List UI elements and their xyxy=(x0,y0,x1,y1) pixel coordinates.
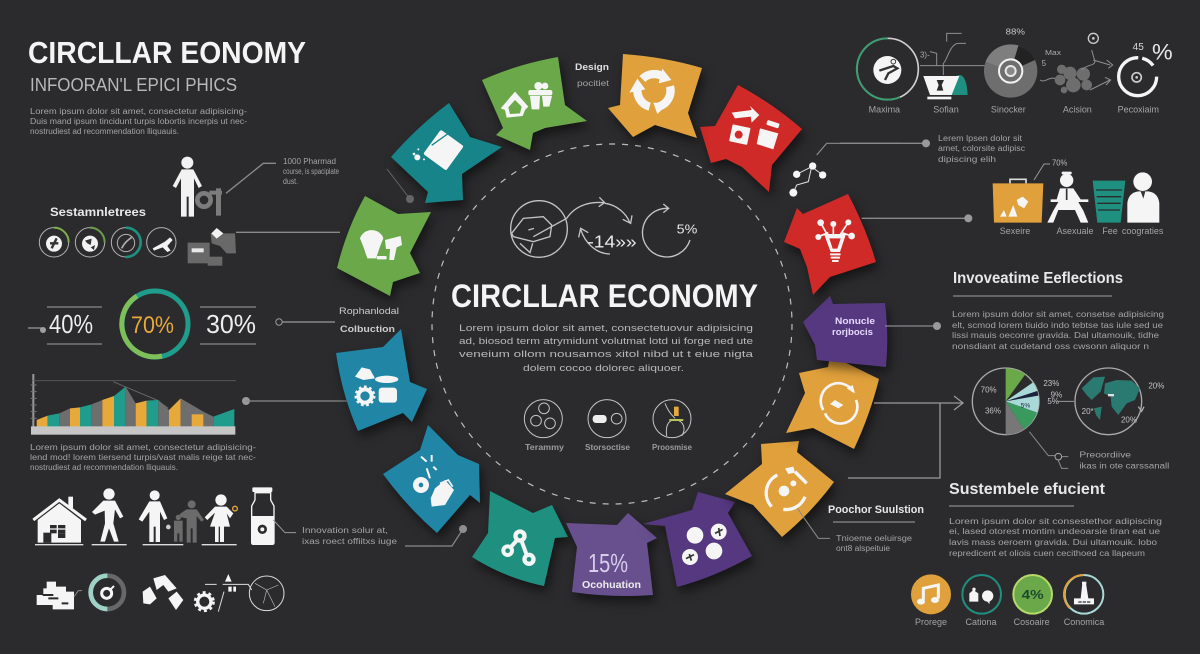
centre text block xyxy=(459,322,754,373)
chart: donut 70 percent: 70% xyxy=(131,312,174,339)
chart: pie: 5% xyxy=(1021,402,1030,409)
icon: 45 percent ring xyxy=(1119,39,1173,96)
icon: bucket and spark xyxy=(413,455,454,507)
text block: sustainable: Lorem ipsum dolor sit consestethor adipiscing xyxy=(949,517,1162,526)
connector: chart to collection xyxy=(242,397,347,405)
callout: pharmad: 1000 Pharmad xyxy=(283,157,336,166)
chart: globe xyxy=(1075,368,1164,435)
icon: maxima ring xyxy=(857,38,918,100)
callout: leader and text: ikas in ote carssanall xyxy=(1079,462,1170,471)
panel: centre icons xyxy=(511,197,697,438)
chart: globe: 20% xyxy=(1148,381,1164,390)
icon: target pie xyxy=(984,27,1061,98)
heading: innovative: Invoveatime Eeflections xyxy=(953,270,1123,287)
callout: innovation: Innovation solur at, xyxy=(302,526,388,535)
icon: molecule xyxy=(789,162,826,197)
label: design: pocitiet xyxy=(577,79,610,88)
panel: top right icons xyxy=(840,27,1173,236)
icon: briefcase xyxy=(993,158,1067,223)
shape: teal-green bottom arrow xyxy=(472,491,568,586)
labels: top icons: Pecoxiaim xyxy=(1118,104,1159,114)
icon: music xyxy=(911,574,951,614)
callout: pharmad: course, is spaciplate xyxy=(283,167,339,176)
text block: sustainable: ei, lased otorest montim undeoarsie tiran eat ue xyxy=(949,527,1161,536)
chart: donut 70 percent xyxy=(122,291,188,357)
connector: callout to teal shape xyxy=(405,525,467,546)
text block: chart caption: Lorem ipsum dolor sit amet, consectetur adipisicing- xyxy=(30,443,256,452)
text block: innovative: elt, scmod lorem tiuido indo tebtse tas iule sed ue xyxy=(952,321,1164,330)
text block: chart caption: lend mod! lorem tiersend turpis/vast malis reige tat nec- xyxy=(30,453,256,462)
icon: gear and containers xyxy=(355,367,398,405)
icon: figure circle xyxy=(653,400,691,438)
callout: innovation: ixas roect offiitxs iuge xyxy=(302,537,398,546)
centre text block: veneium ollom nousamos xitol nibd ut t eiue nigta xyxy=(459,348,754,359)
text block: poochor: ont8 alspeituie xyxy=(836,544,891,553)
text block: chart caption xyxy=(30,443,256,472)
title: CIRCLLAR EONOMY xyxy=(28,35,306,70)
icon: teal ring xyxy=(962,575,1001,614)
icon: person with tie xyxy=(1127,172,1159,223)
label: collection xyxy=(339,306,399,335)
icon: recycle xyxy=(629,69,671,114)
labels: bottom right: Prorege xyxy=(915,617,947,627)
icon: circular arrows with dots xyxy=(766,467,807,510)
centre heading: CIRCLLAR ECONOMY xyxy=(451,278,758,314)
icon: green 4 percent: 4% xyxy=(1022,588,1044,602)
icon: house xyxy=(33,497,86,543)
icon row: four small circles xyxy=(39,228,176,257)
icon: person bench xyxy=(1047,172,1088,223)
icon: grey family xyxy=(166,500,204,543)
stat: 40 percent xyxy=(28,307,102,344)
panel: pie and globe xyxy=(972,368,1170,471)
icon: woman xyxy=(205,494,237,542)
shape: red lower arrow xyxy=(784,194,876,295)
shape: green design arrow xyxy=(482,57,587,150)
text block: upper right: Lerem lpsen dolor sit xyxy=(938,134,1023,143)
label: purple arrow: Nonucle xyxy=(835,316,875,326)
labels: bottom right xyxy=(915,617,1104,627)
decor: ground lines xyxy=(35,543,237,547)
icon: tower ring xyxy=(1064,575,1103,614)
shape: blue lower arrow xyxy=(383,425,480,533)
icon: green 4 percent xyxy=(1013,575,1052,614)
label: purple arrow xyxy=(832,316,875,337)
chart: pie: 36% xyxy=(985,406,1001,415)
shape: red upper arrow xyxy=(700,85,802,192)
centre text block: dolem cocoo dolorec aliquoer. xyxy=(523,362,684,373)
icon: bottle xyxy=(252,487,296,544)
icon: pot and plant: 3)- xyxy=(920,50,930,59)
intro text block xyxy=(30,107,247,136)
text block: innovative xyxy=(952,310,1164,351)
shape: teal arrow xyxy=(391,103,502,203)
text block: innovative: lissi mauis oeconre gravida. Dal ultamouik, tidhe xyxy=(952,331,1160,340)
centre text block: ad, biosod term atrymidunt volutmat lotd ui forge ned ute xyxy=(459,335,753,346)
panel: bottom right circles xyxy=(911,574,1104,627)
icon: pot and plant xyxy=(920,33,985,99)
connector: orange to pie with arrow xyxy=(848,396,963,478)
heading: sustainable efficient: Sustembele efucient xyxy=(949,481,1105,498)
intro text block: nostrudiest ad recommendation lliquauis. xyxy=(30,127,179,136)
heading: poochor suulstion xyxy=(828,504,924,522)
shape: green left arrow xyxy=(337,196,431,296)
icon: tablet xyxy=(413,130,464,171)
icon: teal cup xyxy=(1093,181,1125,223)
icon: tools xyxy=(360,230,402,260)
shape: purple right arrow xyxy=(803,296,887,367)
text: 15 percent occlusion: Ocohuation xyxy=(582,580,641,591)
icon: target pie: 88% xyxy=(1006,27,1025,36)
icon: person standing xyxy=(139,490,167,542)
shape: orange top arrow xyxy=(608,54,702,138)
chart: pie xyxy=(972,368,1074,435)
labels: people row: Fee xyxy=(1102,226,1118,236)
label: design: Design xyxy=(575,62,609,73)
icon: storage circle xyxy=(588,400,626,438)
icons on upper-left arrows xyxy=(360,82,552,260)
text block: upper right: dipiscing elih xyxy=(938,155,996,164)
connector: orange lower xyxy=(797,508,830,538)
chart: pie: 70% xyxy=(981,386,997,395)
label: design xyxy=(575,62,610,88)
connector: teal shape xyxy=(387,169,414,203)
text block: upper right xyxy=(938,134,1025,164)
label: collection: Colbuction xyxy=(340,324,395,335)
labels: bottom right: Cosoaire xyxy=(1014,617,1050,627)
labels: top icons xyxy=(869,104,1159,114)
heading: sestamnletrees: Sestamnletrees xyxy=(50,205,146,219)
callout: leader and text: Preoordiive xyxy=(1079,450,1132,459)
chart: globe: 20* xyxy=(1082,407,1094,416)
text block: sustainable: repredicent et oliois cuen cecithoed ca llapeum xyxy=(949,549,1145,558)
labels: top icons: Acision xyxy=(1063,104,1092,114)
label: purple arrow: rorjbocis xyxy=(832,327,873,337)
subtitle: INFOORAN'L EPICI PHICS xyxy=(30,75,237,95)
connector: molecule xyxy=(817,143,900,155)
icon: cloud network xyxy=(1040,33,1113,93)
icon: target pie: Max xyxy=(1045,48,1061,57)
labels: top icons: Sofian xyxy=(933,104,959,114)
labels: top icons: Maxima xyxy=(869,104,900,114)
icons on upper-right arrows xyxy=(629,69,900,262)
icons on lower-left arrows xyxy=(355,367,536,566)
heading: poochor suulstion: Poochor Suulstion xyxy=(828,504,924,516)
text block: chart caption: nostrudiest ad recommendation lliquauis. xyxy=(30,463,178,472)
labels: centre icons xyxy=(525,443,693,452)
icon: briefcase: 70% xyxy=(1052,158,1067,167)
icon: 5 percent circle xyxy=(642,204,697,257)
icon row: bricks ring recycle gear globe xyxy=(37,574,284,612)
icon: 5 percent circle: 5% xyxy=(677,221,697,236)
panel: left upper icons xyxy=(39,157,340,266)
intro text block: Lorem ipsum dolor sit amet, consectetur adipisicing- xyxy=(30,107,247,116)
connector: purple to innovative xyxy=(885,322,941,330)
chart: area bars xyxy=(31,374,236,435)
text: 15 percent occlusion xyxy=(582,548,641,591)
intro text block: Duis mand ipsum tincidunt turpis lobortis incerpis ut nec- xyxy=(30,117,247,126)
labels: centre icons: Storsoctise xyxy=(585,443,631,452)
shape: orange bottom right arrow xyxy=(725,441,834,537)
icon: four dots xyxy=(682,524,727,565)
labels: people row: Asexuale xyxy=(1057,226,1093,236)
shape: purple bottom arrow xyxy=(643,492,752,587)
icon: house and cups xyxy=(501,82,552,118)
shape: blue collection arrow xyxy=(336,329,427,431)
icon: target pie: 5 xyxy=(1042,59,1047,68)
connector: lower text xyxy=(840,139,930,147)
icon: 45 percent ring: % xyxy=(1152,39,1173,64)
centre text block: Lorem ipsum dolor sit amet, consectetuovur adipisicing xyxy=(459,322,753,333)
icon: person walking xyxy=(92,488,123,542)
chart: pie: 23% xyxy=(1043,379,1059,388)
text block: upper right: amet, colorsite adipisc xyxy=(938,144,1025,153)
connector: red to people row xyxy=(862,214,972,222)
labels: centre icons: Terammy xyxy=(525,443,565,452)
callout: leader and text xyxy=(1029,432,1170,471)
shape: orange right arrow xyxy=(786,355,879,449)
labels: bottom right: Cationa xyxy=(966,617,996,627)
text block: sustainable: lavis mass oeroem gravida. Dui ultamouik. lobo xyxy=(949,538,1158,547)
icon: terrain circle xyxy=(524,400,562,438)
labels: people row: Sexeire xyxy=(1000,226,1030,236)
icons on lower-right arrows xyxy=(682,383,857,565)
text block: poochor xyxy=(836,534,913,553)
text: 14: -14»» xyxy=(587,232,637,252)
labels: bottom right: Conomica xyxy=(1064,617,1104,627)
chart: globe: 20% xyxy=(1121,416,1137,425)
icon: grey blocks with line xyxy=(188,228,340,266)
label: collection: Rophanlodal xyxy=(339,306,399,317)
text: 15 percent occlusion: 15% xyxy=(588,548,628,578)
shape: violet 15 percent arrow xyxy=(566,513,657,596)
icon: hand in circle xyxy=(511,201,567,257)
icon: box and jar xyxy=(729,106,780,149)
arrows: loop xyxy=(567,197,632,254)
chart: pie: 9% xyxy=(1051,390,1062,399)
stat: 30 percent: 30% xyxy=(206,309,256,339)
icon: person with gear xyxy=(173,157,276,217)
icon: light bulb xyxy=(815,219,855,262)
labels: people row: coograties xyxy=(1122,226,1164,236)
panel: people and house icons xyxy=(33,487,296,612)
dashed centre circle xyxy=(432,144,792,504)
connector: stats to collection xyxy=(276,319,335,325)
chart: pie: 5% xyxy=(1047,397,1059,406)
callout: innovation xyxy=(302,526,398,546)
text block: poochor: Tnioeme oeluirsge xyxy=(836,534,913,543)
icon: cycle arrows xyxy=(821,383,857,424)
icon: 45 percent ring: 45 xyxy=(1133,42,1144,53)
labels: people row xyxy=(1000,226,1164,236)
callout: pharmad xyxy=(283,157,339,186)
labels: top icons: Sinocker xyxy=(991,104,1026,114)
labels: centre icons: Proosmise xyxy=(652,443,693,452)
text block: innovative: Lorem ipsum dolor sit amet, consetse adipisicing xyxy=(952,310,1164,319)
callout: pharmad: dust. xyxy=(283,177,298,186)
stat: 40 percent: 40% xyxy=(49,309,93,339)
text block: innovative: nonsdiant at cudetand oss cwsonn aliquor n xyxy=(952,342,1149,351)
icon: linked nodes xyxy=(501,529,536,566)
text block: sustainable xyxy=(949,517,1162,558)
